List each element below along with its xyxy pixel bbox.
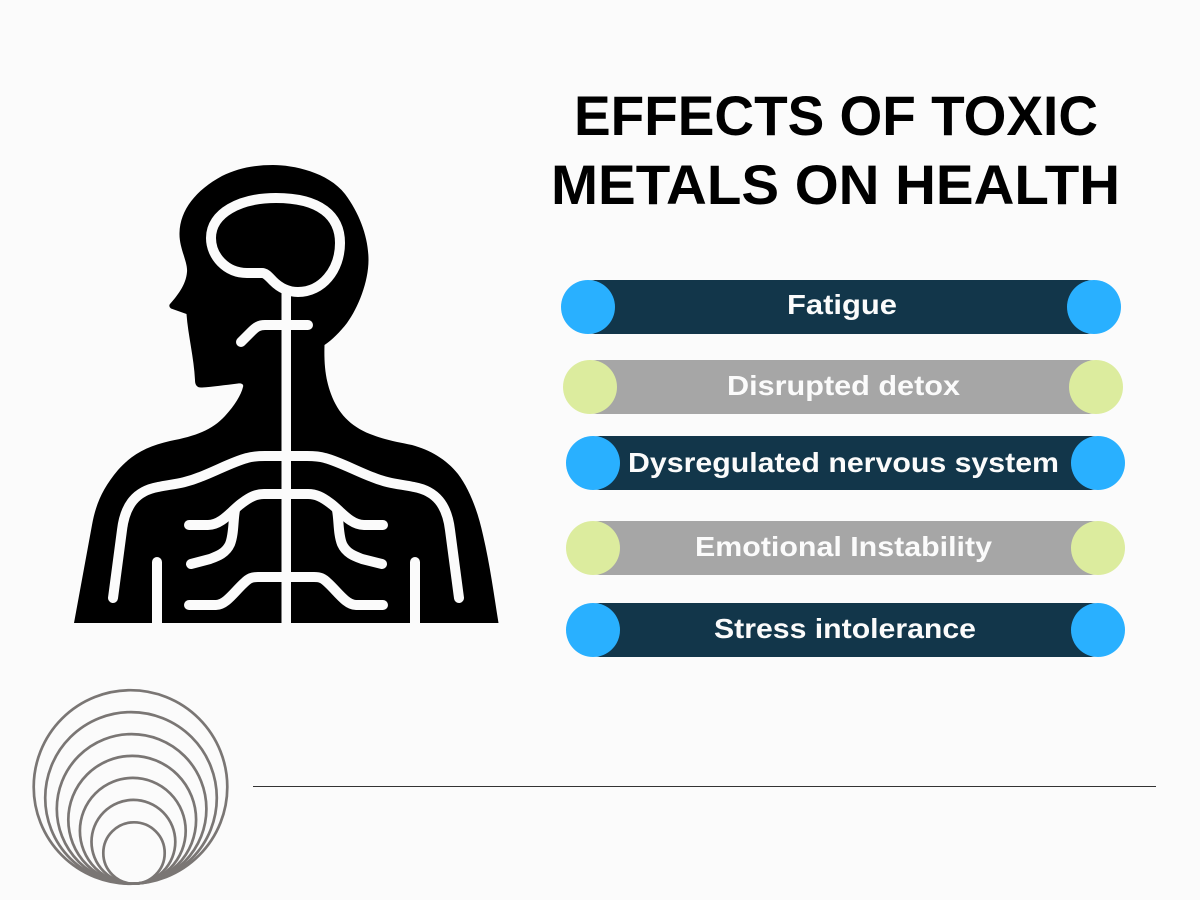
left rib branch [191, 510, 235, 564]
pill: Disrupted detox: Disrupted detox [727, 370, 960, 401]
pill: Dysregulated nervous system [566, 436, 1125, 490]
spine [282, 288, 291, 623]
lower chest nerves [189, 577, 383, 605]
title [551, 84, 1120, 216]
pill: Stress intolerance: Stress intolerance [714, 613, 976, 644]
pill: Disrupted detox [563, 360, 1123, 414]
title line 1: EFFECTS OF TOXIC [574, 84, 1098, 147]
pill: Emotional Instability: Emotional Instability [695, 531, 992, 562]
pill: Emotional Instability [566, 521, 1125, 575]
pill: Fatigue [561, 280, 1121, 334]
decorative nested circles [34, 690, 227, 884]
pill: Stress intolerance [566, 603, 1125, 657]
upper chest nerves [189, 494, 383, 525]
footer divider line [253, 786, 1156, 787]
pill: Fatigue: Fatigue [787, 289, 897, 320]
list of effects [561, 280, 1125, 657]
icon: human silhouette with nervous system [74, 165, 498, 623]
left arm line [152, 557, 162, 623]
title line 2: METALS ON HEALTH [551, 153, 1120, 216]
brain outline [211, 198, 340, 292]
right arm line [410, 557, 420, 623]
neck nerve [241, 325, 308, 342]
pill: Dysregulated nervous system: Dysregulated nervous system [628, 447, 1059, 478]
silhouette body [74, 165, 498, 623]
shoulder nerves [113, 456, 459, 598]
right rib branch [337, 510, 382, 564]
